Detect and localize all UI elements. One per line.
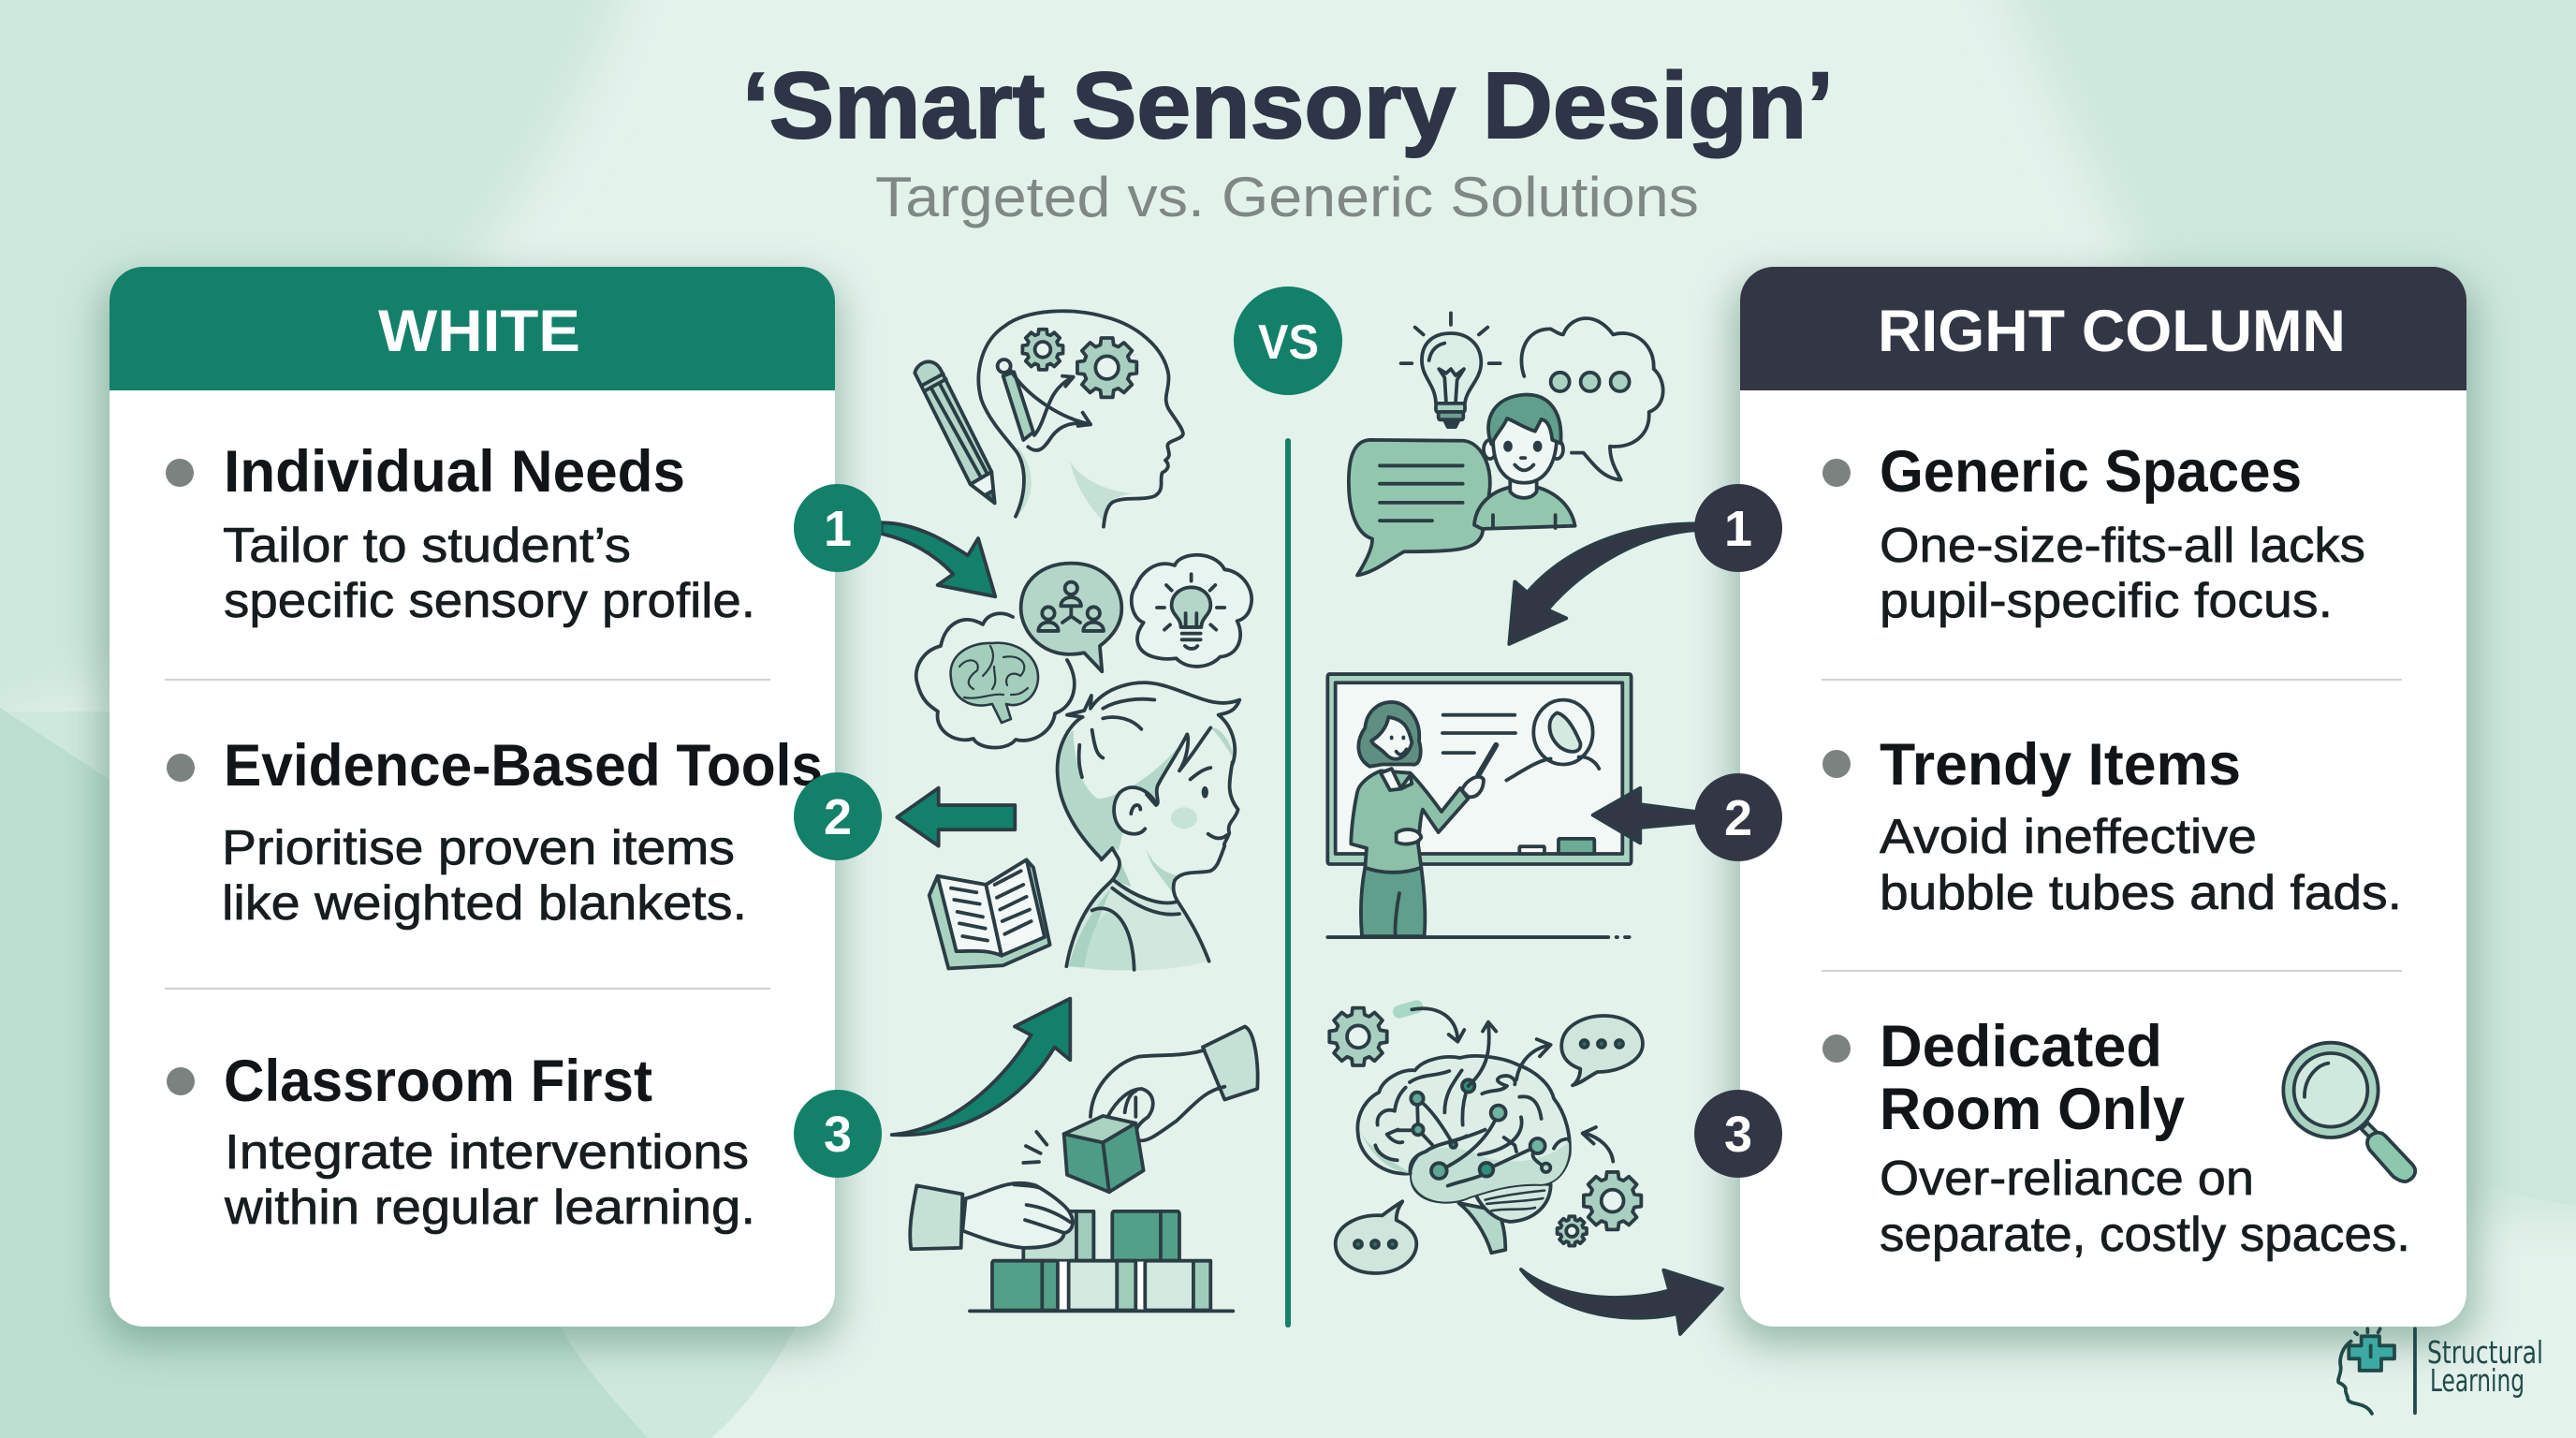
- icon: light bulb thought cloud: [1132, 555, 1251, 667]
- icon: gear left: [1329, 1008, 1387, 1065]
- arrow: brain to dedicated room: [1521, 1269, 1722, 1334]
- icon: text speech bubble: [1349, 440, 1490, 575]
- item: individual needs: [166, 439, 755, 628]
- item: generic spaces: [1822, 439, 2365, 628]
- teacher figure: [1351, 702, 1496, 936]
- item: classroom first: Integrate interventions: [225, 1125, 749, 1180]
- illustration: head with gears and pencil: [882, 311, 1251, 671]
- brain: [1357, 1056, 1570, 1253]
- logo: structural learning: Learning: [2430, 1362, 2525, 1399]
- icon: gear right: [1584, 1172, 1641, 1229]
- item: dedicated room only: separate, costly spaces.: [1880, 1208, 2410, 1262]
- item: individual needs: Individual Needs: [224, 439, 685, 505]
- vs badge: VS: [1258, 315, 1319, 370]
- panel: generic right column: [1734, 267, 2473, 1343]
- icon: inner pencil and arrows: [998, 360, 1090, 450]
- icon: left speech bubble: [1336, 1201, 1416, 1273]
- right column header: [1740, 267, 2466, 390]
- smudge and process arrows: [1399, 1006, 1613, 1162]
- item: trendy items: Avoid ineffective: [1880, 810, 2257, 864]
- item: classroom first: Classroom First: [224, 1049, 652, 1114]
- item: generic spaces: Generic Spaces: [1880, 439, 2302, 505]
- logo: structural learning: [2338, 1328, 2543, 1414]
- item: dedicated room only: Dedicated: [1880, 1014, 2162, 1079]
- item: trendy items: bubble tubes and fads.: [1880, 866, 2402, 920]
- item: dedicated room only: [1822, 1014, 2410, 1262]
- number badges left: [794, 484, 882, 1178]
- item: evidence-based tools: [167, 733, 823, 931]
- vs badge: [1234, 286, 1342, 395]
- stacked blocks: [970, 1211, 1233, 1311]
- number badges right: 1: [1724, 501, 1752, 557]
- left column header: WHITE: [378, 299, 580, 364]
- item: individual needs: specific sensory profile.: [224, 574, 755, 628]
- arrow: badge 3 up to boy: [892, 999, 1070, 1135]
- icon: right speech bubble: [1561, 1016, 1643, 1085]
- lower hand: [910, 1183, 1073, 1249]
- icon: open book: [929, 859, 1050, 968]
- arrow: badge 2 to boy: [897, 788, 1015, 846]
- item: classroom first: within regular learning.: [224, 1181, 755, 1235]
- item: trendy items: Trendy Items: [1880, 732, 2241, 798]
- item: individual needs: Tailor to student’s: [223, 519, 631, 573]
- logo: structural learning: Structural: [2427, 1334, 2543, 1371]
- student figure: [1474, 395, 1575, 529]
- item: evidence-based tools: like weighted blankets.: [222, 876, 747, 931]
- boy shirt: [1066, 880, 1209, 971]
- number badges left: 1: [824, 501, 852, 557]
- number badges right: 3: [1724, 1107, 1752, 1163]
- number badges right: [1694, 484, 1782, 1178]
- whiteboard: [1327, 674, 1632, 864]
- title: ‘Smart Sensory Design’: [742, 53, 1834, 158]
- right column header: RIGHT COLUMN: [1878, 299, 2346, 364]
- illustration: hands and building blocks: [910, 1026, 1258, 1311]
- item: dedicated room only: Room Only: [1880, 1077, 2185, 1142]
- icon: pencil: [915, 361, 995, 503]
- arrow: badge 2 to whiteboard: [1593, 788, 1696, 844]
- item: classroom first: [167, 1049, 755, 1235]
- number badges left: 2: [824, 789, 852, 845]
- item: evidence-based tools: Prioritise proven items: [222, 821, 735, 875]
- icon: large gear: [1077, 338, 1136, 397]
- subtitle: Targeted vs. Generic Solutions: [875, 166, 1699, 228]
- illustration: brain network: [1329, 1006, 1722, 1334]
- item: evidence-based tools: Evidence-Based Tools: [224, 733, 823, 799]
- icon: magnifying glass: [2283, 1043, 2415, 1181]
- arrow: badge 1 to ideas: [882, 522, 995, 596]
- left column header: [110, 267, 835, 390]
- arrow: badge 1 to classroom: [1509, 523, 1696, 644]
- item: generic spaces: pupil-specific focus.: [1880, 574, 2333, 628]
- panel: targeted left column: [103, 267, 838, 1343]
- item: generic spaces: One-size-fits-all lacks: [1880, 519, 2365, 573]
- illustration: thought cloud with brain: [916, 613, 1075, 748]
- icon: small gear: [1022, 330, 1063, 370]
- illustration: teacher at whiteboard: [1327, 674, 1696, 937]
- logo mark: [2338, 1328, 2415, 1414]
- upper hand: [1090, 1026, 1258, 1140]
- number badges left: 3: [824, 1107, 852, 1163]
- falling cube: [1023, 1116, 1144, 1192]
- item: trendy items: [1822, 732, 2402, 920]
- illustration: generic student with speech: [1349, 313, 1696, 644]
- icon: ellipsis thought cloud: [1521, 318, 1663, 480]
- icon: people speech bubble: [1021, 564, 1121, 671]
- icon: light bulb: [1401, 313, 1500, 427]
- vs divider line: [1285, 438, 1291, 1328]
- number badges right: 2: [1724, 790, 1752, 846]
- item: dedicated room only: Over-reliance on: [1880, 1152, 2254, 1206]
- illustration: boy in profile: [1058, 682, 1239, 971]
- icon: tiny gear: [1558, 1216, 1587, 1246]
